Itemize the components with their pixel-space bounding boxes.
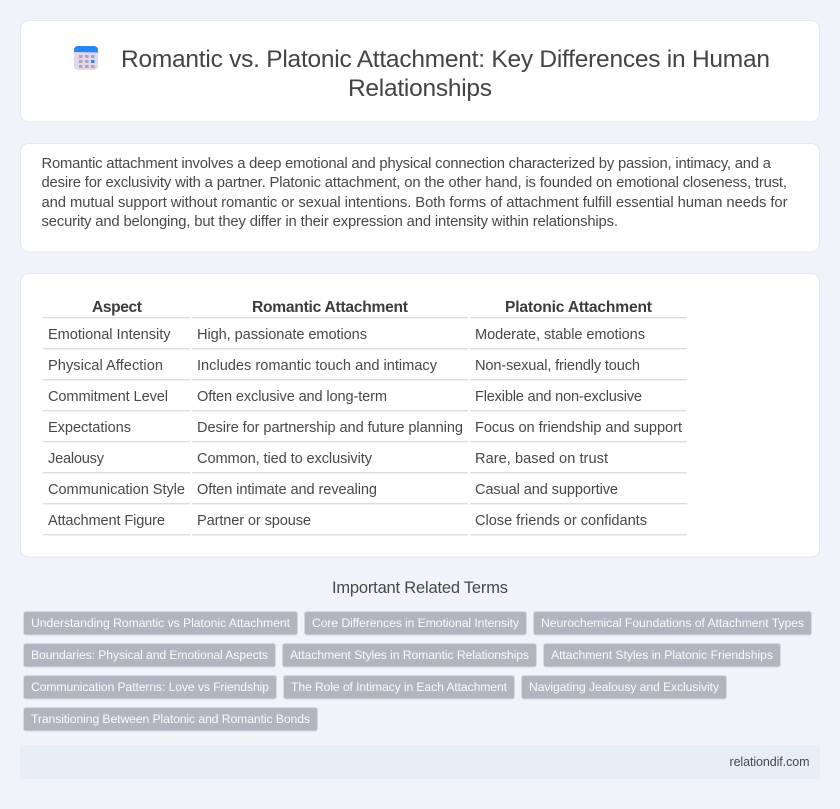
- chip: Navigating Jealousy and Exclusivity: [529, 680, 720, 694]
- row: communication style: Casual and supportive: [475, 482, 618, 498]
- title: Relationships: [348, 75, 492, 102]
- row: commitment level: Flexible and non-exclusive: [475, 389, 642, 405]
- chip: [534, 612, 812, 635]
- panel: related terms chips: [24, 612, 812, 731]
- chip: Attachment Styles in Romantic Relationships: [290, 648, 529, 662]
- row: attachment figure: Attachment Figure: [48, 513, 165, 529]
- chip: Attachment Styles in Platonic Friendships: [551, 648, 773, 662]
- row: commitment level: [48, 389, 642, 405]
- title: [121, 46, 770, 102]
- row: jealousy: Rare, based on trust: [475, 451, 608, 467]
- chip: [522, 676, 726, 699]
- chip: The Role of Intimacy in Each Attachment: [291, 680, 508, 694]
- chip: Core Differences in Emotional Intensity: [312, 616, 520, 630]
- chip: Transitioning Between Platonic and Romantic Bonds: [31, 712, 310, 726]
- table header: Platonic Attachment: [505, 299, 652, 316]
- chip: [284, 676, 514, 699]
- row: expectations: Expectations: [48, 420, 131, 436]
- footer: [20, 745, 820, 779]
- text block: description: [42, 156, 788, 230]
- row: jealousy: [48, 451, 608, 467]
- row: communication style: Often intimate and revealing: [197, 482, 377, 498]
- row: physical affection: [48, 358, 640, 374]
- row: commitment level: Commitment Level: [48, 389, 168, 405]
- icon: calendar: [74, 46, 98, 70]
- footer: relationdif.com: [730, 755, 810, 769]
- row: attachment figure: [48, 513, 647, 529]
- chip: Communication Patterns: Love vs Friendship: [31, 680, 269, 694]
- chip: [24, 708, 318, 731]
- row: communication style: [48, 482, 618, 498]
- chip: [304, 612, 526, 635]
- text block: description: desire for exclusivity with a partner. Platonic attachment, on the other hand, is founded on emotional closeness, trust,: [42, 175, 787, 191]
- row: emotional intensity: Emotional Intensity: [48, 327, 171, 343]
- row: expectations: Focus on friendship and support: [475, 420, 682, 436]
- text block: description: Romantic attachment involves a deep emotional and physical connection characterized by passion, intimacy, and a: [42, 156, 772, 172]
- row: commitment level: Often exclusive and long-term: [197, 389, 387, 405]
- chip: [282, 644, 536, 667]
- row: physical affection: Non-sexual, friendly touch: [475, 358, 640, 374]
- chip: [24, 676, 276, 699]
- title: Romantic vs. Platonic Attachment: Key Differences in Human: [121, 46, 770, 73]
- row: expectations: [48, 420, 682, 436]
- chip: [24, 644, 276, 667]
- chip: [544, 644, 780, 667]
- row: communication style: Communication Style: [48, 482, 185, 498]
- row: emotional intensity: Moderate, stable emotions: [475, 327, 645, 343]
- row: attachment figure: Partner or spouse: [197, 513, 311, 529]
- panel: comparison table: [20, 274, 820, 557]
- text block: description: security and belonging, but they differ in their expression and intensity within relationships.: [42, 214, 618, 230]
- table header: [92, 299, 652, 316]
- chip: Understanding Romantic vs Platonic Attachment: [31, 616, 291, 630]
- row: jealousy: Jealousy: [48, 451, 105, 467]
- table header: Romantic Attachment: [252, 299, 408, 316]
- chip: [24, 612, 298, 635]
- row: jealousy: Common, tied to exclusivity: [197, 451, 373, 467]
- panel: header: [20, 20, 820, 122]
- panel: description: [20, 144, 820, 252]
- chip: Neurochemical Foundations of Attachment Types: [541, 616, 804, 630]
- row: physical affection: Includes romantic touch and intimacy: [197, 358, 438, 374]
- row: expectations: Desire for partnership and future planning: [197, 420, 463, 436]
- heading: important related terms: Important Related Terms: [332, 579, 508, 597]
- row: emotional intensity: [48, 327, 645, 343]
- chip: Boundaries: Physical and Emotional Aspects: [31, 648, 268, 662]
- row: emotional intensity: High, passionate emotions: [197, 327, 367, 343]
- text block: description: and mutual support without romantic or sexual intentions. Both forms of attachment fulfill essential human needs for: [42, 195, 788, 211]
- row: attachment figure: Close friends or confidants: [475, 513, 647, 529]
- table header: Aspect: [92, 299, 142, 316]
- row: physical affection: Physical Affection: [48, 358, 163, 374]
